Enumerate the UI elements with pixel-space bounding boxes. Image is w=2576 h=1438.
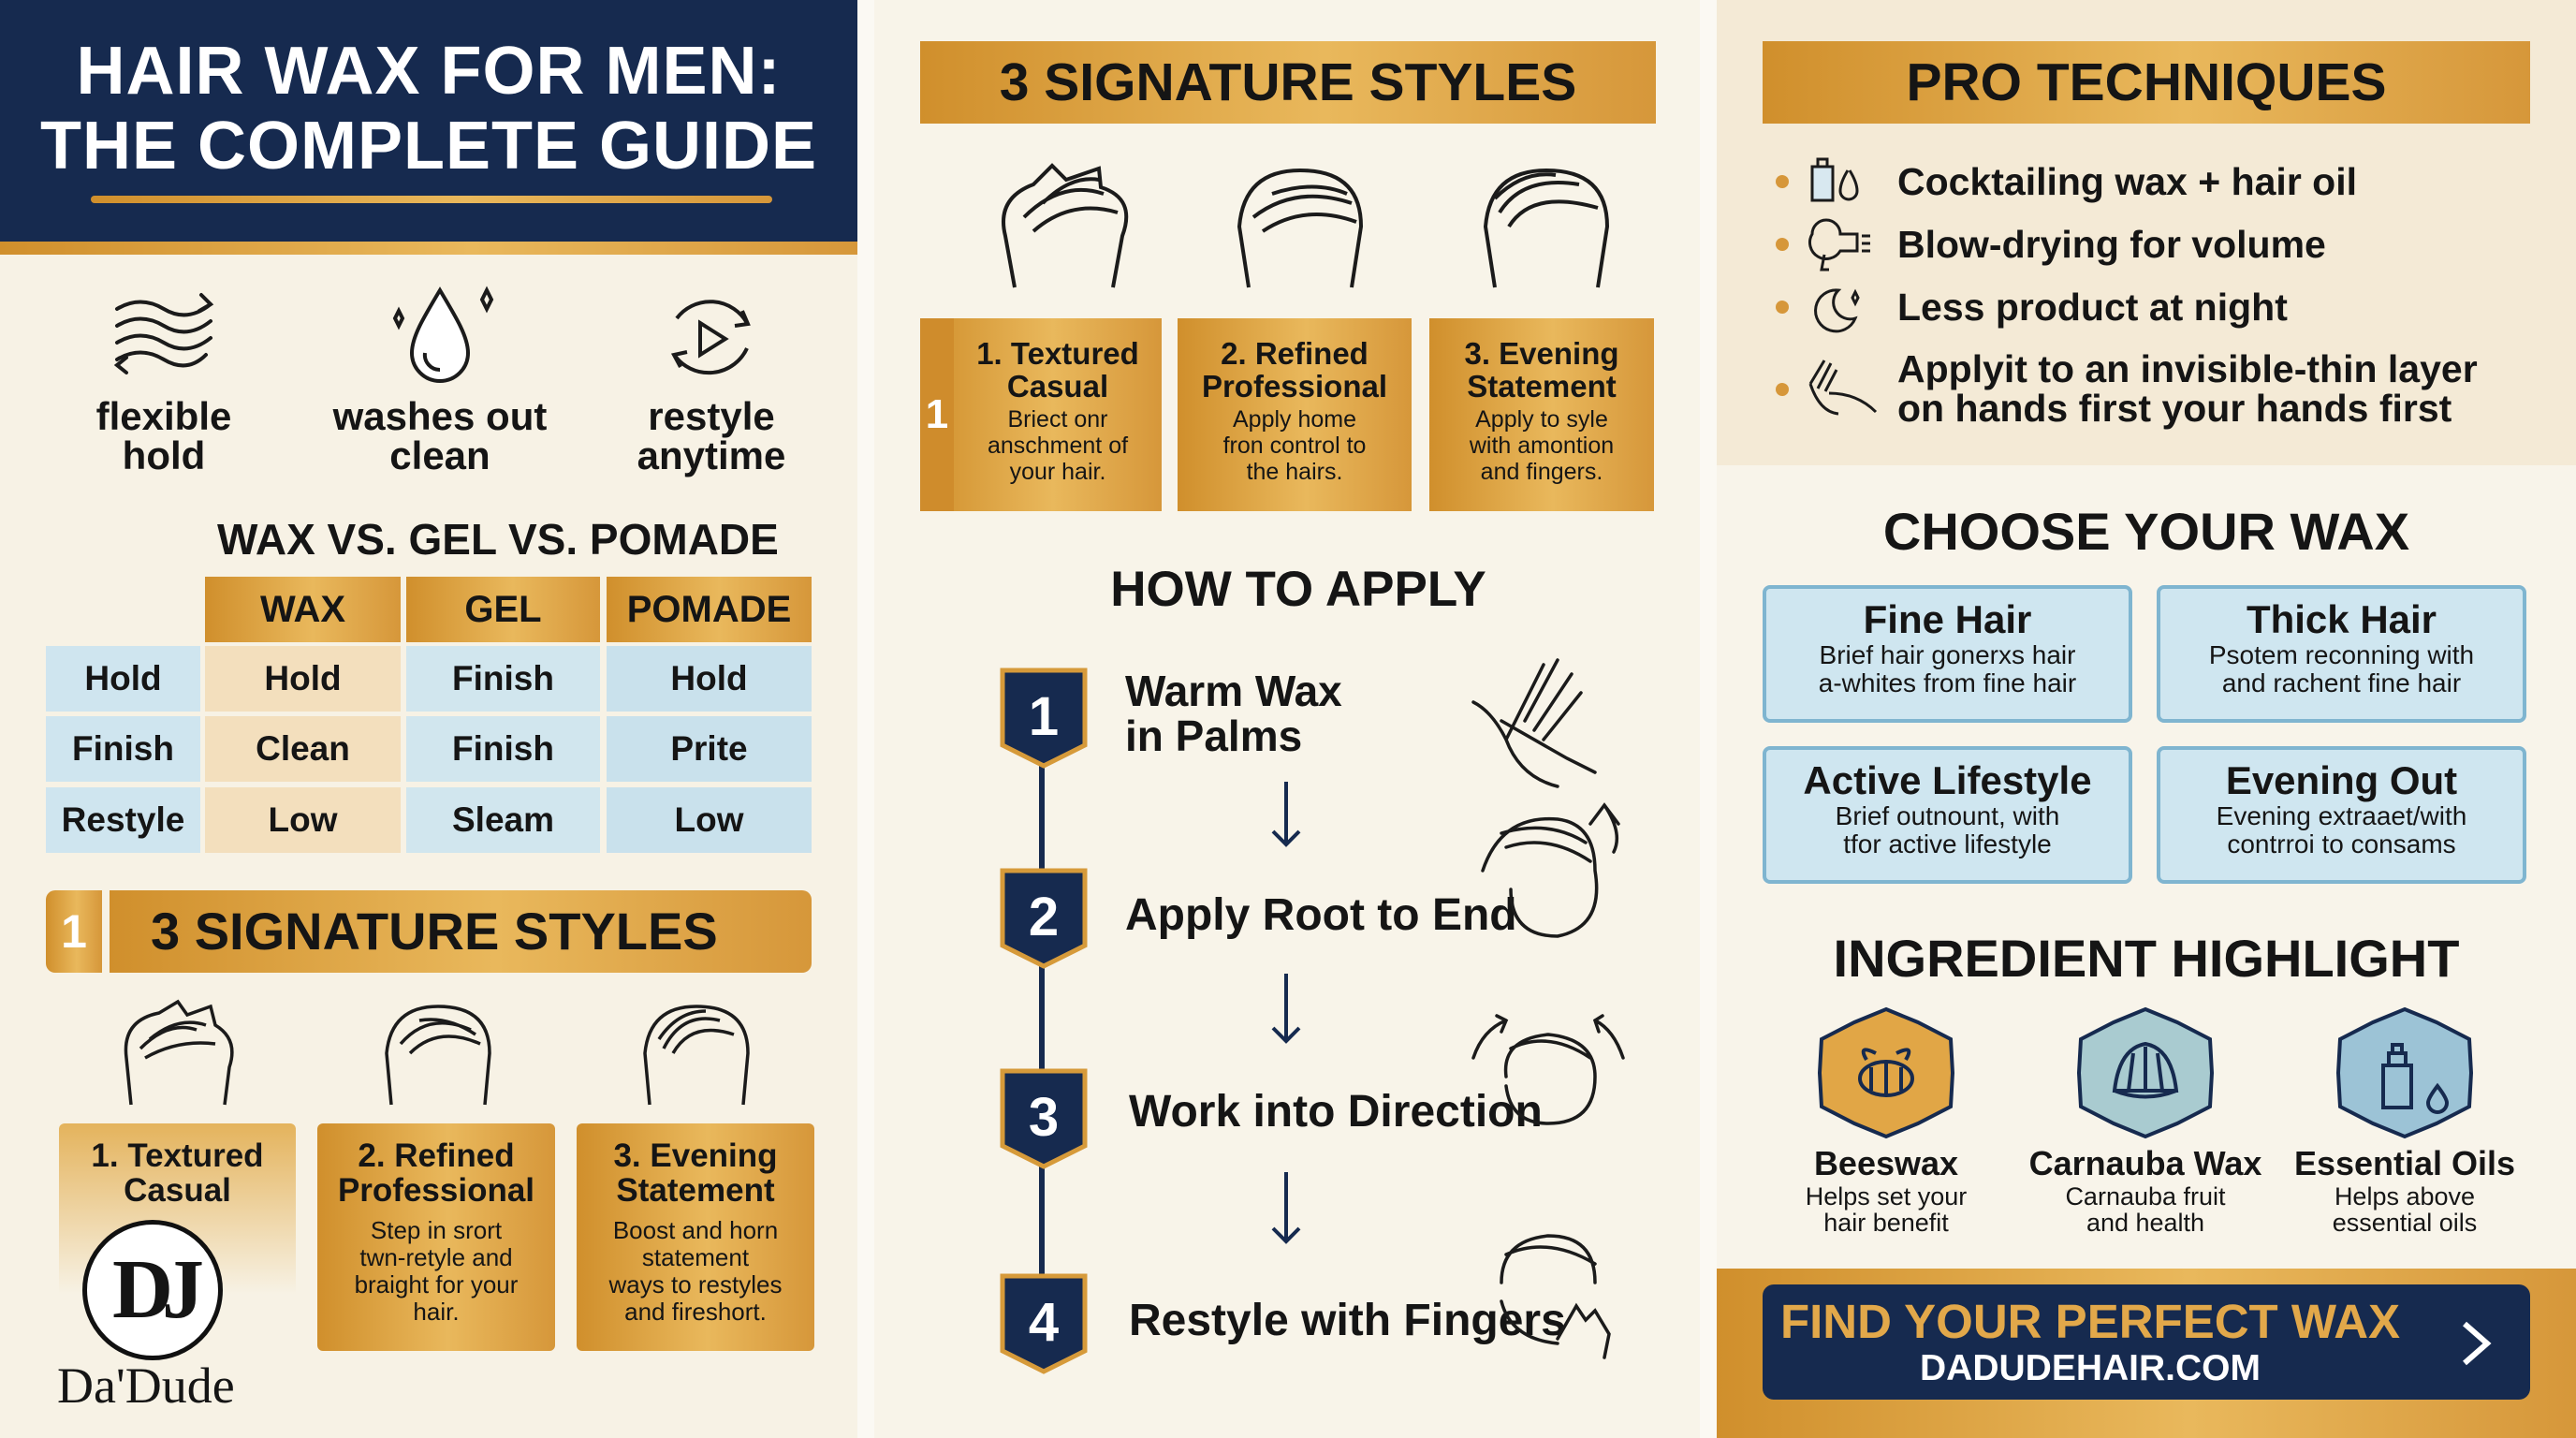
- step badges: 4: [1029, 1292, 1059, 1353]
- ingredient badges: [1818, 1007, 2473, 1138]
- banner: 3 signature styles (left): 3 SIGNATURE STYLES: [151, 902, 718, 961]
- card: thick hair: and rachent fine hair: [2222, 668, 2461, 697]
- card: refined professional: [317, 1123, 555, 1351]
- comparison table: Low: [268, 800, 337, 839]
- card: evening out: contrroi to consams: [2227, 829, 2456, 858]
- card: fine hair: Fine Hair: [1864, 597, 2031, 641]
- icon: hair heads middle: [1002, 163, 1609, 288]
- comparison table: Hold: [670, 659, 748, 697]
- ingredient: essential oils: [2294, 1144, 2515, 1237]
- comparison table: Finish: [452, 729, 554, 768]
- card: evening statement: Statement: [1467, 369, 1617, 404]
- comparison table: Clean: [256, 729, 350, 768]
- comparison table: Sleam: [452, 800, 554, 839]
- card: refined professional: twn-retyle and: [359, 1243, 513, 1271]
- header banner: [0, 0, 857, 242]
- comparison table: [46, 577, 812, 853]
- step badges: 3: [1029, 1087, 1059, 1148]
- ingredient: beeswax: [1806, 1144, 1967, 1237]
- comparison table: Restyle: [62, 800, 184, 839]
- ingredient: beeswax: Beeswax: [1814, 1144, 1958, 1182]
- step 1 text: in Palms: [1125, 712, 1302, 760]
- card: textured casual: anschment of: [988, 433, 1128, 459]
- card: fine hair: a-whites from fine hair: [1819, 668, 2076, 697]
- bullet list: Applyit to an invisible-thin layer: [1897, 347, 2478, 390]
- label: washes out clean: washes out: [333, 394, 547, 438]
- label: flexible hold: hold: [123, 433, 205, 477]
- bullet list: on hands first your hands first: [1897, 387, 2452, 430]
- banner: pro techniques: PRO TECHNIQUES: [1906, 52, 2387, 112]
- card: active lifestyle: tfor active lifestyle: [1843, 829, 2052, 858]
- bullet list: [1776, 157, 2478, 430]
- title: THE COMPLETE GUIDE: [40, 109, 817, 183]
- card: evening statement: 3. Evening: [1464, 336, 1619, 371]
- card: evening out: [2157, 746, 2526, 884]
- label: washes out clean: clean: [389, 433, 490, 477]
- icon: chevron: [2463, 1322, 2492, 1365]
- comparison table: POMADE: [627, 588, 791, 629]
- card: evening statement: ways to restyles: [609, 1270, 782, 1299]
- ingredient: essential oils: Essential Oils: [2294, 1144, 2515, 1182]
- comparison table: WAX: [260, 588, 345, 629]
- card: active lifestyle: Brief outnount, with: [1836, 801, 2059, 830]
- card: textured casual: [920, 318, 1162, 511]
- card: textured casual: Briect onr: [1007, 406, 1107, 433]
- title: [40, 34, 817, 183]
- comparison table: Hold: [264, 659, 342, 697]
- card: textured casual: 1. Textured: [976, 336, 1139, 371]
- section: pro techniques: [1717, 0, 2576, 465]
- card: refined professional: hair.: [413, 1298, 460, 1326]
- button: [1763, 1284, 2530, 1400]
- logo: Da'Dude: [57, 1220, 235, 1414]
- card: evening statement: Boost and horn: [613, 1216, 778, 1244]
- label: flexible hold: flexible: [96, 394, 231, 438]
- ingredient: essential oils: Helps above: [2334, 1182, 2475, 1211]
- bullet list: Cocktailing wax + hair oil: [1897, 160, 2357, 203]
- banner: pro techniques: [1763, 41, 2530, 124]
- card: refined professional: 2. Refined: [358, 1137, 515, 1174]
- footer CTA: [1717, 1269, 2576, 1438]
- panel: left: [0, 0, 857, 1438]
- label: flexible hold: [96, 394, 231, 477]
- button: FIND YOUR PERFECT WAX: [1780, 1295, 2400, 1348]
- bullet list: Blow-drying for volume: [1897, 223, 2326, 266]
- panel: middle: [874, 0, 1700, 1438]
- card: thick hair: Psotem reconning with: [2209, 640, 2474, 669]
- card: evening statement: and fingers.: [1481, 459, 1603, 485]
- comparison table: Low: [674, 800, 743, 839]
- ingredient: essential oils: essential oils: [2333, 1209, 2477, 1237]
- step 2 text: Apply Root to End: [1125, 890, 1517, 940]
- heading: choose your wax: CHOOSE YOUR WAX: [1883, 502, 2409, 561]
- card: refined professional: braight for your: [355, 1270, 518, 1299]
- comparison table: Finish: [452, 659, 554, 697]
- step 4 text: Restyle with Fingers: [1129, 1296, 1566, 1345]
- card: textured casual: Casual: [124, 1172, 231, 1209]
- comparison table: GEL: [464, 588, 542, 629]
- ingredient: carnauba: [2029, 1144, 2261, 1237]
- card: evening statement: Apply to syle: [1475, 406, 1608, 433]
- card: evening statement: Statement: [616, 1172, 775, 1209]
- ingredient: beeswax: Helps set your: [1806, 1182, 1967, 1211]
- ingredient: carnauba: and health: [2086, 1209, 2204, 1237]
- arrows: [1271, 782, 1301, 1244]
- heading: comparison: WAX VS. GEL VS. POMADE: [217, 515, 779, 564]
- ingredient: carnauba: Carnauba fruit: [2065, 1182, 2226, 1211]
- card: evening statement: statement: [642, 1243, 749, 1271]
- label: washes out clean: [333, 394, 547, 477]
- card: active lifestyle: [1763, 746, 2132, 884]
- button: DADUDEHAIR.COM: [1920, 1348, 2261, 1388]
- card: evening statement: [577, 1123, 814, 1351]
- icon: hair heads left: [124, 1000, 750, 1105]
- card: thick hair: [2157, 585, 2526, 723]
- card: refined professional: Professional: [1202, 369, 1387, 404]
- step badges: 2: [1029, 887, 1059, 947]
- label: restyle anytime: anytime: [637, 433, 785, 477]
- step 3 text: Work into Direction: [1129, 1087, 1543, 1137]
- step badges: 1: [1029, 686, 1059, 747]
- banner: 3 signature styles (left): 1: [61, 905, 87, 958]
- ingredient: beeswax: hair benefit: [1823, 1209, 1949, 1237]
- card: refined professional: fron control to: [1223, 433, 1366, 459]
- card: textured casual: Casual: [1007, 369, 1108, 404]
- panel: right: [1717, 0, 2576, 1438]
- card: textured casual: [59, 1123, 296, 1351]
- card: evening statement: 3. Evening: [613, 1137, 778, 1174]
- card: textured casual: 1. Textured: [91, 1137, 264, 1174]
- card: fine hair: [1763, 585, 2132, 723]
- card: refined professional: Professional: [338, 1172, 534, 1209]
- bullet list: Less product at night: [1897, 286, 2288, 329]
- logo: Da'Dude: Da'Dude: [57, 1357, 235, 1414]
- card: active lifestyle: Active Lifestyle: [1803, 758, 2092, 802]
- card: evening statement: with amontion: [1470, 433, 1614, 459]
- icon: restyle: [671, 300, 751, 374]
- card: fine hair: Brief hair gonerxs hair: [1820, 640, 2075, 669]
- ingredient: carnauba: Carnauba Wax: [2029, 1144, 2261, 1182]
- card: refined professional: the hairs.: [1247, 459, 1342, 485]
- banner: 3 signature styles (left): [46, 890, 812, 973]
- step 1 text: Warm Wax: [1125, 667, 1342, 715]
- card: evening out: Evening Out: [2226, 758, 2457, 802]
- card: refined professional: Step in srort: [371, 1216, 502, 1244]
- card: thick hair: Thick Hair: [2247, 597, 2437, 641]
- label: restyle anytime: restyle: [648, 394, 775, 438]
- card: refined professional: 2. Refined: [1221, 336, 1368, 371]
- card: textured casual: your hair.: [1010, 459, 1105, 485]
- card: textured casual: 1: [926, 391, 948, 437]
- step 1 text: [1125, 667, 1342, 760]
- card: evening statement: [1429, 318, 1654, 511]
- comparison table: Prite: [670, 729, 748, 768]
- timeline line: [1039, 730, 1045, 1311]
- logo: Da'Dude: DJ: [112, 1243, 193, 1336]
- heading: ingredient highlight: INGREDIENT HIGHLIGHT: [1834, 929, 2459, 988]
- step badges: [1000, 668, 1088, 1374]
- label: restyle anytime: [637, 394, 785, 477]
- card: refined professional: [1178, 318, 1412, 511]
- icons: hands and heads: [1471, 658, 1625, 1359]
- title: HAIR WAX FOR MEN:: [77, 34, 781, 109]
- comparison table: Finish: [72, 729, 174, 768]
- card: evening statement: and fireshort.: [624, 1298, 767, 1326]
- card: refined professional: Apply home: [1233, 406, 1356, 433]
- heading: how to apply: HOW TO APPLY: [1110, 562, 1486, 617]
- icon: water drop: [393, 286, 494, 383]
- banner: 3 signature styles: 3 SIGNATURE STYLES: [1000, 52, 1576, 112]
- comparison table: Hold: [84, 659, 162, 697]
- banner: 3 signature styles: [920, 41, 1656, 124]
- card: evening out: Evening extraaet/with: [2217, 801, 2466, 830]
- icon: flexible hold: [114, 292, 213, 374]
